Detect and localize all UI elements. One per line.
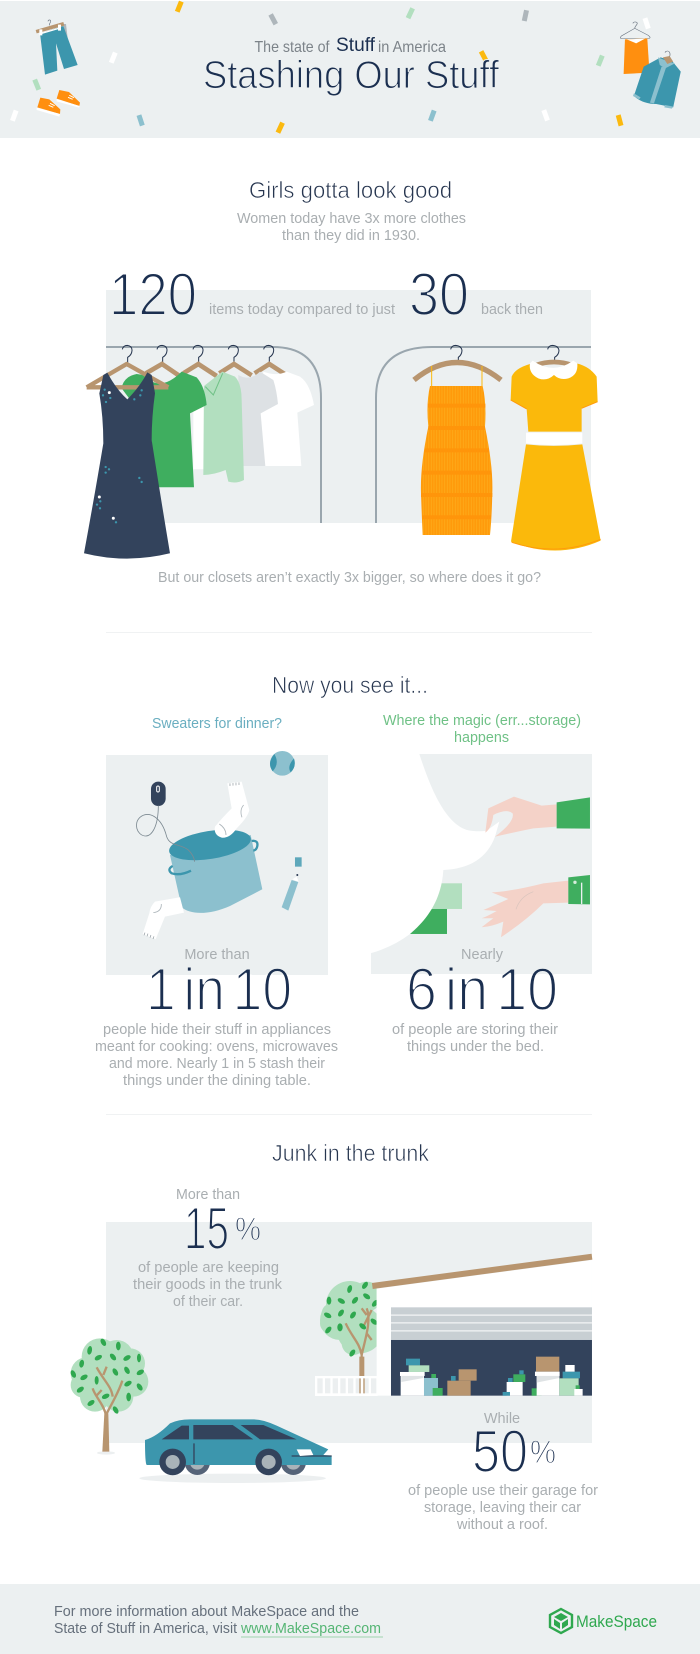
closet rods [106, 347, 591, 523]
text: trunk [133, 1260, 283, 1310]
text: appliances: meant for cooking: ovens, microwaves [95, 1039, 338, 1055]
orange dress on hanger [414, 345, 501, 535]
header banner [0, 1, 700, 138]
panel: bedroom [371, 754, 592, 974]
sock top [215, 782, 249, 838]
garage interior [391, 1340, 592, 1396]
header eyebrow text [254, 35, 446, 56]
green t-shirt [122, 372, 207, 487]
header eyebrow text: in America [378, 39, 446, 56]
hanger of dress [87, 364, 168, 387]
stat: 15%: 15 [184, 1195, 229, 1262]
icon: mouse [151, 782, 166, 806]
illustration: tree and car [70, 1338, 332, 1483]
illustration: rack from 1930 with two dresses [414, 345, 601, 551]
intro text: clothes: than they did in 1930. [282, 228, 420, 244]
logo: MakeSpace: MakeSpace [576, 1612, 657, 1631]
closing question text: But our closets aren’t exactly 3x bigger, so where does it go? [158, 570, 541, 586]
pot lid and handles [167, 825, 257, 874]
stat: 1 in 10: More than [184, 947, 250, 963]
illustration: garage with tree and boxes [315, 1257, 592, 1396]
house wall and roof [372, 1257, 592, 1396]
text: under the bed: of people are storing their [392, 1022, 558, 1038]
footer text: www.MakeSpace.com [240, 1621, 381, 1637]
section heading: junk in the trunk: Junk in the trunk [272, 1140, 429, 1166]
hand bottom with cuff [482, 875, 590, 937]
stat: 15%: More than [176, 1187, 240, 1203]
text: trunk: their goods in the trunk [133, 1277, 283, 1293]
header eyebrow text: The state of [254, 39, 330, 56]
sock bottom [143, 897, 184, 939]
tree [70, 1338, 148, 1455]
stat: 30 items: 30 [409, 261, 469, 328]
footer [0, 1584, 700, 1654]
main title: Stashing Our Stuff [203, 54, 499, 97]
fence [315, 1376, 378, 1396]
text: garage: of people use their garage for [408, 1483, 598, 1499]
panel: driveway background [106, 1222, 592, 1443]
tree by house [320, 1281, 377, 1376]
hand top with sleeve [485, 797, 590, 837]
stat: 6 in 10: Nearly [461, 947, 504, 963]
stat: 1 in 10: 1 in 10 [146, 956, 292, 1023]
icon: orange top and denim shirt on hangers [620, 22, 681, 109]
stat: 50%: While [484, 1411, 520, 1427]
icon: jeans on hanger and shoes [36, 20, 80, 117]
text: appliances [95, 1022, 338, 1089]
stat: 15%: % [235, 1211, 261, 1247]
panel: closet background [106, 290, 591, 523]
text: appliances: and more. Nearly 1 in 5 stash their [109, 1056, 325, 1072]
section heading: girls: Girls gotta look good [249, 177, 452, 203]
mouse cord [136, 806, 195, 862]
text: appliances: things under the dining table. [123, 1073, 311, 1089]
white t-shirt [260, 372, 314, 466]
subheading: magic [383, 713, 581, 746]
pot body [170, 835, 262, 913]
stat: 50%: 50 [472, 1418, 528, 1485]
hooks and hangers [122, 345, 287, 377]
grey t-shirt [238, 372, 278, 466]
bed cover [371, 754, 499, 953]
car [139, 1419, 332, 1483]
section heading: now you see it: Now you see it... [272, 672, 428, 698]
confetti [10, 1, 651, 134]
text: garage: without a roof. [456, 1517, 548, 1533]
panel: kitchen [106, 755, 328, 975]
light green top [203, 372, 244, 483]
stat: 120 items: 120 [109, 261, 197, 328]
subheading: sweaters: Sweaters for dinner? [152, 716, 282, 732]
icon: ball [270, 751, 295, 776]
logo: MakeSpace [550, 1609, 657, 1633]
illustration: pot with socks, mouse, ball and pencil [136, 751, 302, 939]
illustration: hands lifting bed cover [371, 754, 590, 953]
text: garage [408, 1483, 598, 1533]
text: trunk: of people are keeping [138, 1260, 279, 1276]
navy dress [84, 372, 170, 559]
illustration: today's rack with five garments [84, 345, 314, 559]
yellow dress with white collar [511, 345, 601, 551]
text: garage: storage, leaving their car [424, 1500, 581, 1516]
boxes under bed [407, 883, 462, 934]
icon: pencil [282, 857, 302, 911]
text: appliances: people hide their stuff in appliances [103, 1022, 331, 1038]
footer text: For more information about MakeSpace and the [54, 1604, 359, 1620]
footer text [54, 1604, 383, 1638]
subheading: magic: happens [454, 730, 509, 746]
stat: 30 items [409, 261, 543, 328]
text: trunk: of their car. [173, 1294, 243, 1310]
stat: 120 items [109, 261, 395, 328]
stored boxes [400, 1357, 583, 1396]
intro text: clothes [237, 211, 466, 244]
footer text: State of Stuff in America, visit [54, 1621, 237, 1637]
intro text: clothes: Women today have 3x more clothes [237, 211, 466, 227]
stat: 6 in 10: 6 in 10 [406, 956, 558, 1023]
text: under the bed: things under the bed. [407, 1039, 544, 1055]
subheading: magic: Where the magic (err...storage) [383, 713, 581, 729]
header eyebrow text: Stuff [336, 35, 376, 56]
stat: 50%: % [530, 1434, 556, 1470]
stat: 120 items: items today compared to just [209, 302, 395, 318]
text: under the bed [392, 1022, 558, 1055]
garage door [391, 1307, 592, 1340]
stat: 30 items: back then [481, 302, 543, 318]
